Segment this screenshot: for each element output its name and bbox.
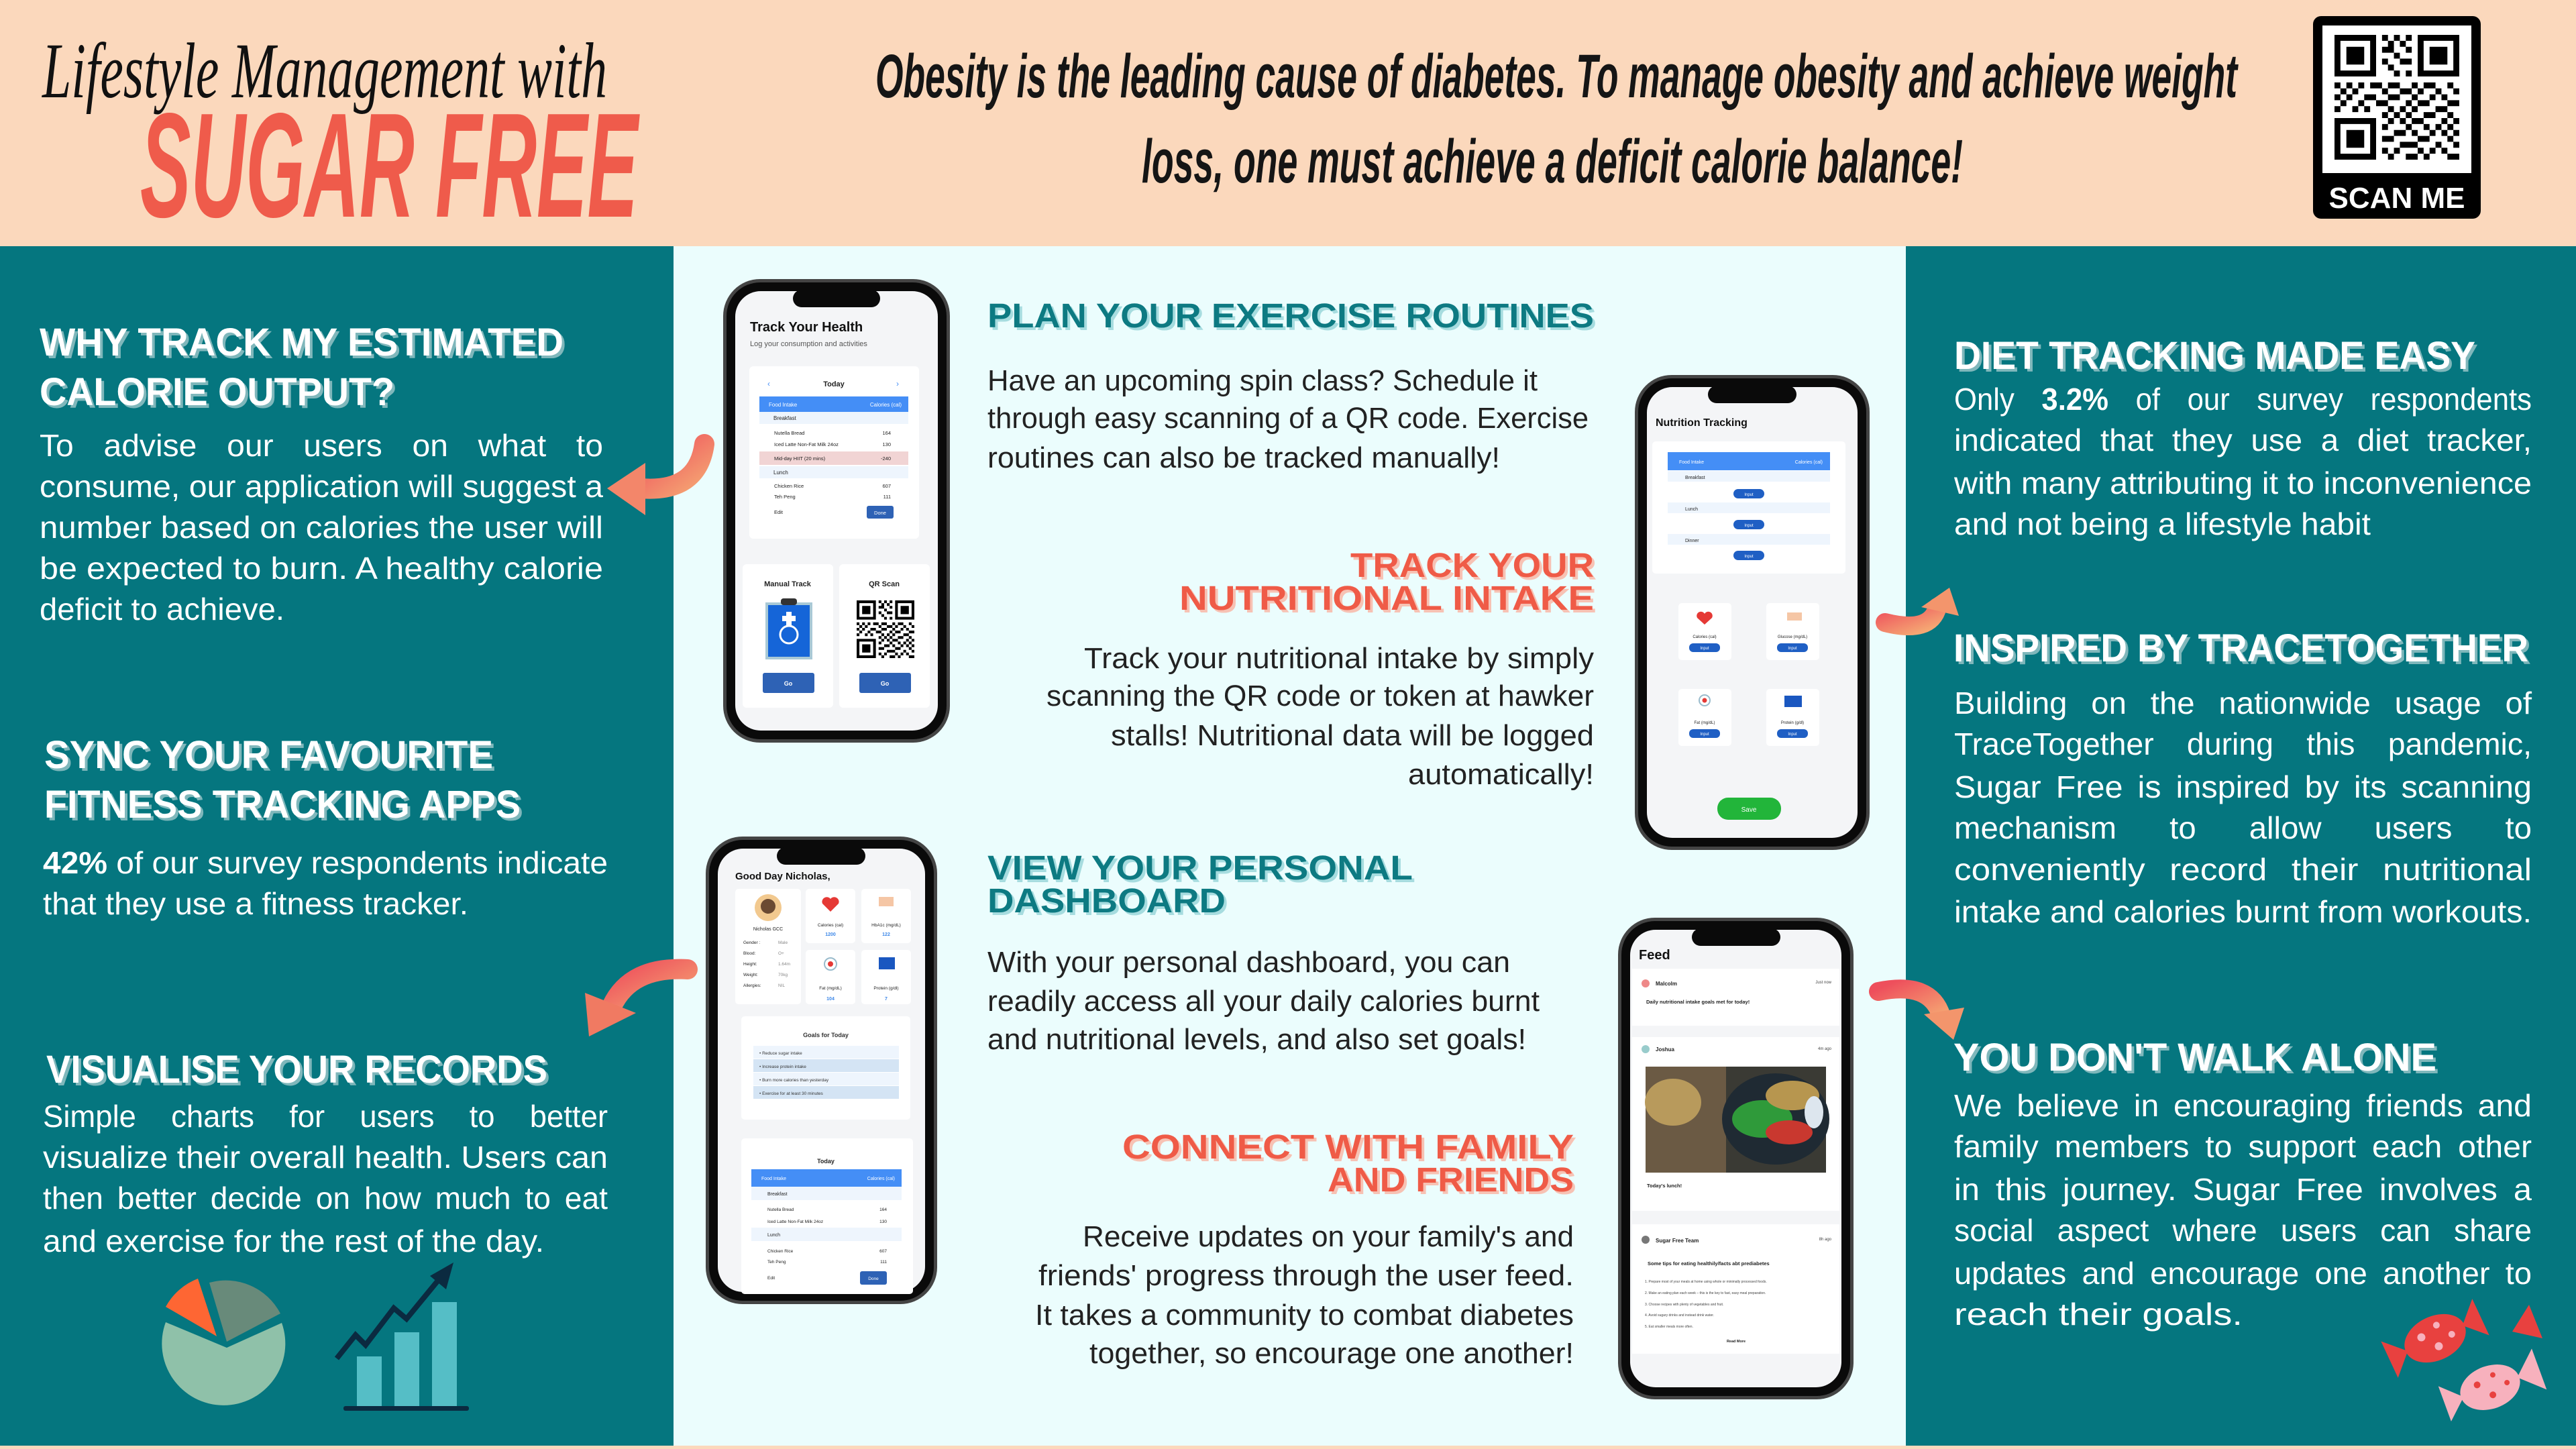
- heading: sync fitness apps: FITNESS TRACKING APPS: [44, 783, 521, 826]
- phone 2: dashboard: Done: [868, 1277, 879, 1281]
- phone 1: track your health: Mid-day HIIT (20 mins): [774, 455, 826, 462]
- phone 2: dashboard: Today: [817, 1158, 835, 1165]
- text: walk alone body: [1954, 1088, 2532, 1332]
- phone 4: feed: Malcolm: [1656, 981, 1677, 987]
- text: tracetogether body: Sugar Free is inspired by its scanning: [1954, 769, 2532, 804]
- heading: why track: WHY TRACK MY ESTIMATED: [42, 323, 566, 367]
- phone 2: dashboard: Male: [778, 941, 788, 945]
- heading: sync fitness apps: SYNC YOUR FAVOURITE: [47, 736, 496, 780]
- heading: connect family friends: [1122, 1128, 1576, 1201]
- phone 1: track your health: Lunch: [773, 470, 788, 476]
- phone 1: track your health: Go: [881, 680, 890, 687]
- header background: [0, 0, 2576, 246]
- text: nutritional body: [1046, 642, 1594, 791]
- heading: you don't walk alone: YOU DON'T WALK ALONE: [1953, 1036, 2436, 1079]
- text: visualise body: then better decide on how much to eat: [43, 1181, 608, 1216]
- heading: track nutritional intake: TRACK YOUR: [1353, 549, 1597, 587]
- phone 1: track your health: QR Scan: [869, 580, 900, 588]
- heading: sync fitness apps: SYNC YOUR FAVOURITE: [44, 733, 493, 777]
- phone 2: dashboard: Teh Peng: [767, 1260, 786, 1265]
- text: diet tracking body: [1953, 382, 2532, 541]
- phone 4: feed: Just now: [1815, 981, 1832, 985]
- title: [42, 27, 640, 249]
- phone 3: nutrition tracking: Input: [1744, 493, 1754, 497]
- title: SUGAR FREE: [140, 83, 640, 249]
- phone 3: nutrition tracking: Dinner: [1685, 539, 1699, 543]
- phone 2: dashboard: Calories (cal): [818, 923, 843, 928]
- phone 1: track your health: Manual Track: [764, 580, 812, 588]
- phone 1: track your health: Chicken Rice: [774, 483, 804, 489]
- text: connect body: [1035, 1220, 1574, 1370]
- phone 2: dashboard: Gender :: [743, 941, 760, 945]
- icon: pie chart: [162, 1279, 285, 1405]
- phone 3: nutrition tracking: Breakfast: [1685, 476, 1705, 480]
- heading: diet tracking made easy: DIET TRACKING MADE EASY: [1954, 334, 2475, 378]
- phone 1: track your health: Breakfast: [773, 415, 797, 421]
- phone 2: dashboard: Height:: [743, 962, 757, 967]
- text: diet tracking body: indicated that they use a diet tracker,: [1954, 423, 2532, 458]
- phone 3: nutrition tracking: Input: [1744, 555, 1754, 559]
- left panel background: [0, 246, 674, 1447]
- text: dashboard body: [987, 946, 1540, 1056]
- heading: sync fitness apps: [44, 733, 523, 829]
- QR code: scan me: SCAN ME: [2329, 182, 2465, 215]
- icon: candies: [2380, 1297, 2546, 1424]
- text: dashboard body: readily access all your daily calories burnt: [987, 985, 1540, 1018]
- text: connect body: It takes a community to combat diabetes: [1035, 1299, 1574, 1332]
- text: walk alone body: reach their goals.: [1954, 1297, 2243, 1332]
- phone 2: dashboard: 1.64m: [778, 962, 790, 967]
- heading: plan exercise routines: PLAN YOUR EXERCISE ROUTINES: [990, 299, 1597, 337]
- text: sync body: that they use a fitness tracker.: [43, 886, 468, 921]
- heading: sync fitness apps: FITNESS TRACKING APPS: [47, 786, 523, 829]
- phone 1: track your health: -240: [881, 455, 891, 462]
- phone 4: feed: Today's lunch!: [1647, 1183, 1682, 1189]
- phone 1: track your health: Done: [874, 510, 886, 516]
- text: why track body: consume, our application will suggest a: [40, 469, 603, 504]
- phone 2: dashboard: Weight:: [743, 973, 758, 977]
- right panel background: [1906, 246, 2576, 1447]
- text: diet tracking body: and not being a lifestyle habit: [1954, 506, 2371, 541]
- heading: visualise records: VISUALISE YOUR RECORDS: [46, 1048, 547, 1091]
- heading: why track: CALORIE OUTPUT?: [42, 373, 397, 417]
- QR code: scan me: [2313, 16, 2481, 219]
- text: visualise body: [43, 1099, 608, 1258]
- phone 2: dashboard: Blood:: [743, 951, 756, 956]
- phone 4: feed: [1618, 918, 1854, 1399]
- phone 2: dashboard: O+: [778, 951, 784, 956]
- heading: track nutritional intake: [1179, 546, 1597, 620]
- text: why track body: deficit to achieve.: [40, 592, 284, 627]
- heading: view personal dashboard: VIEW YOUR PERSONAL: [987, 849, 1413, 887]
- text: walk alone body: We believe in encouraging friends and: [1954, 1088, 2532, 1123]
- heading: why track: [40, 321, 566, 417]
- phone 2: dashboard: Goals for Today: [803, 1032, 849, 1038]
- text: dashboard body: and nutritional levels, and also set goals!: [987, 1023, 1526, 1056]
- phone 4: feed: 5. Eat smaller meals more often.: [1645, 1325, 1693, 1329]
- phone 1: track your health: 607: [882, 483, 891, 489]
- title: Lifestyle Management with: [42, 27, 607, 115]
- phone 2: dashboard: HbA1c (mg/dL): [871, 923, 901, 928]
- phone 2: dashboard: Food Intake: [761, 1177, 786, 1181]
- phone 4: feed: Daily nutritional intake goals met for today!: [1646, 999, 1750, 1005]
- heading: connect family friends: AND FRIENDS: [1328, 1161, 1574, 1199]
- phone 4: feed: 1. Prepare most of your meals at home using whole or minimally processed foods.: [1645, 1280, 1767, 1284]
- phone 3: nutrition tracking: Input: [1788, 733, 1797, 737]
- phone 2: dashboard: 111: [880, 1260, 887, 1265]
- tagline: [875, 42, 2239, 196]
- phone 2: dashboard: • Reduce sugar intake: [759, 1051, 802, 1056]
- phone 2: dashboard: Breakfast: [767, 1192, 788, 1197]
- phone 1: track your health: 164: [882, 430, 891, 436]
- phone 3: nutrition tracking: Calories (cal): [1693, 635, 1717, 639]
- arrow: to phone 1: [607, 444, 704, 515]
- text: tracetogether body: conveniently record their nutritional: [1954, 852, 2532, 887]
- phone 3: nutrition tracking: Lunch: [1685, 507, 1698, 512]
- heading: inspired by tracetogether: INSPIRED BY TRACETOGETHER: [1956, 629, 2531, 673]
- phone 1: track your health: ‹: [767, 379, 770, 388]
- phone 1: track your health: Go: [784, 680, 793, 687]
- phone 2: dashboard: Nutella Bread: [767, 1208, 794, 1212]
- phone 1: track your health: Log your consumption and activities: [750, 340, 867, 348]
- phone 1: track your health: 130: [882, 441, 891, 447]
- phone 3: nutrition tracking: Save: [1741, 806, 1757, 814]
- phone 4: feed: 4m ago: [1818, 1047, 1832, 1051]
- phone 1: track your health: Iced Latte Non-Fat Milk 24oz: [774, 441, 839, 447]
- phone 2: dashboard: Allergies:: [743, 983, 761, 988]
- phone 2: dashboard: NIL: [778, 983, 785, 988]
- text: why track body: be expected to burn. A healthy calorie: [40, 551, 603, 586]
- text: plan body: routines can also be tracked manually!: [987, 441, 1500, 474]
- text: walk alone body: social aspect where users can share: [1954, 1213, 2532, 1248]
- phone 3: nutrition tracking: Fat (mg/dL): [1694, 721, 1715, 725]
- text: visualise body: visualize their overall health. Users can: [43, 1140, 608, 1175]
- text: tracetogether body: Building on the nationwide usage of: [1954, 686, 2532, 720]
- heading: connect family friends: AND FRIENDS: [1330, 1163, 1576, 1201]
- phone 2: dashboard: Protein (g/dl): [873, 986, 899, 991]
- phone 4: feed: Sugar Free Team: [1656, 1238, 1699, 1244]
- text: nutritional body: stalls! Nutritional data will be logged: [1111, 719, 1594, 752]
- phone 3: nutrition tracking: Food Intake: [1679, 460, 1704, 465]
- phone 1: track your health: Edit: [774, 509, 784, 515]
- text: nutritional body: Track your nutritional intake by simply: [1084, 642, 1594, 675]
- phone 3: nutrition tracking: Input: [1700, 647, 1709, 651]
- phone 4: feed: Feed: [1639, 948, 1670, 963]
- phone 2: dashboard: Fat (mg/dL): [819, 986, 842, 991]
- heading: inspired by tracetogether: INSPIRED BY TRACETOGETHER: [1953, 627, 2528, 670]
- phone 4: feed: Read More: [1727, 1340, 1746, 1344]
- text: why track body: [40, 428, 603, 627]
- heading: visualise records: VISUALISE YOUR RECORDS: [49, 1051, 550, 1094]
- heading: why track: WHY TRACK MY ESTIMATED: [40, 321, 564, 364]
- phone 2: dashboard: • Burn more calories than yesterday: [759, 1078, 829, 1083]
- icon: bar chart with arrow: [337, 1263, 469, 1411]
- phone 3: nutrition tracking: [1635, 375, 1870, 850]
- phone 1: track your health: Nutella Bread: [774, 430, 804, 436]
- text: nutritional body: scanning the QR code or token at hawker: [1046, 680, 1594, 712]
- text: plan body: Have an upcoming spin class? Schedule it: [987, 364, 1538, 397]
- heading: track nutritional intake: NUTRITIONAL INTAKE: [1182, 582, 1597, 620]
- heading: connect family friends: CONNECT WITH FAMILY: [1122, 1128, 1574, 1166]
- text: sync body: 42% of our survey respondents indicate: [43, 845, 608, 880]
- phone 1: track your health: ›: [896, 379, 899, 388]
- phone 2: dashboard: Edit: [767, 1276, 775, 1281]
- phone 2: dashboard: 7: [885, 997, 888, 1002]
- heading: view personal dashboard: [987, 849, 1415, 922]
- text: nutritional body: automatically!: [1408, 758, 1594, 791]
- heading: why track: CALORIE OUTPUT?: [40, 370, 394, 414]
- phone 3: nutrition tracking: Input: [1700, 733, 1709, 737]
- text: walk alone body: in this journey. Sugar Free involves a: [1954, 1172, 2532, 1207]
- heading: track nutritional intake: NUTRITIONAL INTAKE: [1179, 579, 1594, 617]
- heading: plan exercise routines: PLAN YOUR EXERCISE ROUTINES: [987, 297, 1594, 335]
- phone 2: dashboard: 70kg: [778, 973, 788, 977]
- phone 3: nutrition tracking: Protein (g/dl): [1781, 721, 1804, 725]
- heading: view personal dashboard: DASHBOARD: [987, 881, 1226, 920]
- arrow: to phone 4: [1878, 989, 1964, 1040]
- text: tracetogether body: TraceTogether during this pandemic,: [1954, 727, 2532, 761]
- arrow: to phone 3: [1885, 588, 1959, 626]
- phone 2: dashboard: • Exercise for at least 30 minutes: [759, 1091, 824, 1096]
- phone 4: feed: 2. Make an eating plan each week – this is the key to fast, easy meal preparation.: [1645, 1291, 1766, 1295]
- text: connect body: Receive updates on your family's and: [1083, 1220, 1574, 1253]
- phone 2: dashboard: • Increase protein intake: [759, 1065, 806, 1069]
- phone 1: track your health: Today: [823, 380, 845, 388]
- text: why track body: To advise our users on what to: [40, 428, 603, 463]
- phone 1: track your health: Teh Peng: [774, 494, 796, 500]
- phone 1: track your health: Food Intake: [769, 402, 798, 408]
- phone 2: dashboard: Good Day Nicholas,: [735, 871, 830, 882]
- phone 1: track your health: Calories (cal): [870, 402, 902, 408]
- text: connect body: together, so encourage one another!: [1089, 1337, 1574, 1370]
- phone 1: track your health: Track Your Health: [750, 320, 863, 335]
- phone 2: dashboard: 122: [882, 932, 890, 937]
- heading: connect family friends: CONNECT WITH FAMILY: [1125, 1130, 1576, 1169]
- phone 3: nutrition tracking: Input: [1788, 647, 1797, 651]
- text: visualise body: Simple charts for users to better: [43, 1099, 608, 1134]
- phone 3: nutrition tracking: Calories (cal): [1795, 460, 1823, 465]
- heading: you don't walk alone: YOU DON'T WALK ALONE: [1956, 1038, 2439, 1082]
- phone 2: dashboard: Iced Latte Non-Fat Milk 24oz: [767, 1220, 823, 1224]
- text: visualise body: and exercise for the rest of the day.: [43, 1224, 544, 1258]
- phone 2: dashboard: 1200: [825, 932, 836, 937]
- text: diet tracking body: with many attributing it to inconvenience: [1953, 466, 2532, 500]
- phone 1: track your health: 111: [883, 494, 891, 500]
- phone 2: dashboard: Nicholas GCC: [753, 927, 783, 932]
- text: tracetogether body: mechanism to allow users to: [1954, 810, 2532, 845]
- phone 2: dashboard: 104: [826, 997, 835, 1002]
- phone 4: feed: Some tips for eating healthily/facts abt prediabetes: [1648, 1260, 1770, 1267]
- heading: view personal dashboard: DASHBOARD: [990, 884, 1228, 922]
- text: diet tracking body: Only 3.2% of our survey respondents: [1954, 382, 2532, 417]
- phone 3: nutrition tracking: Input: [1744, 524, 1754, 528]
- text: tracetogether body: intake and calories burnt from workouts.: [1954, 894, 2532, 929]
- text: sync body: [43, 845, 608, 921]
- heading: view personal dashboard: VIEW YOUR PERSONAL: [990, 851, 1415, 890]
- arrow: to phone 2: [585, 969, 688, 1036]
- phone 2: dashboard: 164: [879, 1208, 887, 1212]
- heading: track nutritional intake: TRACK YOUR: [1350, 546, 1594, 584]
- phone 2: dashboard: [706, 837, 937, 1304]
- text: why track body: number based on calories the user will: [40, 510, 603, 545]
- phone 2: dashboard: Lunch: [767, 1233, 780, 1238]
- text: connect body: friends' progress through the user feed.: [1038, 1259, 1574, 1292]
- phone 2: dashboard: 130: [879, 1220, 887, 1224]
- text: dashboard body: With your personal dashboard, you can: [987, 946, 1510, 979]
- middle panel background: [674, 246, 1906, 1447]
- heading: diet tracking made easy: DIET TRACKING MADE EASY: [1957, 337, 2478, 380]
- text: walk alone body: family members to support each other: [1954, 1129, 2532, 1164]
- phone 2: dashboard: Chicken Rice: [767, 1249, 794, 1254]
- phone 4: feed: Joshua: [1656, 1046, 1675, 1053]
- text: plan body: [987, 364, 1589, 474]
- tagline: loss, one must achieve a deficit calorie balance!: [1142, 127, 1963, 196]
- phone 3: nutrition tracking: Glucose (mg/dL): [1778, 635, 1807, 639]
- phone 4: feed: 4. Avoid sugary drinks and instead drink water.: [1645, 1313, 1714, 1318]
- text: tracetogether body: [1954, 686, 2532, 929]
- text: plan body: through easy scanning of a QR code. Exercise: [987, 402, 1589, 435]
- phone 3: nutrition tracking: Nutrition Tracking: [1656, 417, 1748, 429]
- phone 4: feed: 3. Choose recipes with plenty of vegetables and fruit.: [1645, 1303, 1723, 1307]
- phone 2: dashboard: 607: [879, 1249, 887, 1254]
- phone 2: dashboard: Calories (cal): [867, 1177, 895, 1181]
- phone 4: feed: 8h ago: [1819, 1238, 1832, 1242]
- text: walk alone body: updates and encourage one another to: [1954, 1256, 2532, 1291]
- phone 1: track your health: [723, 279, 950, 743]
